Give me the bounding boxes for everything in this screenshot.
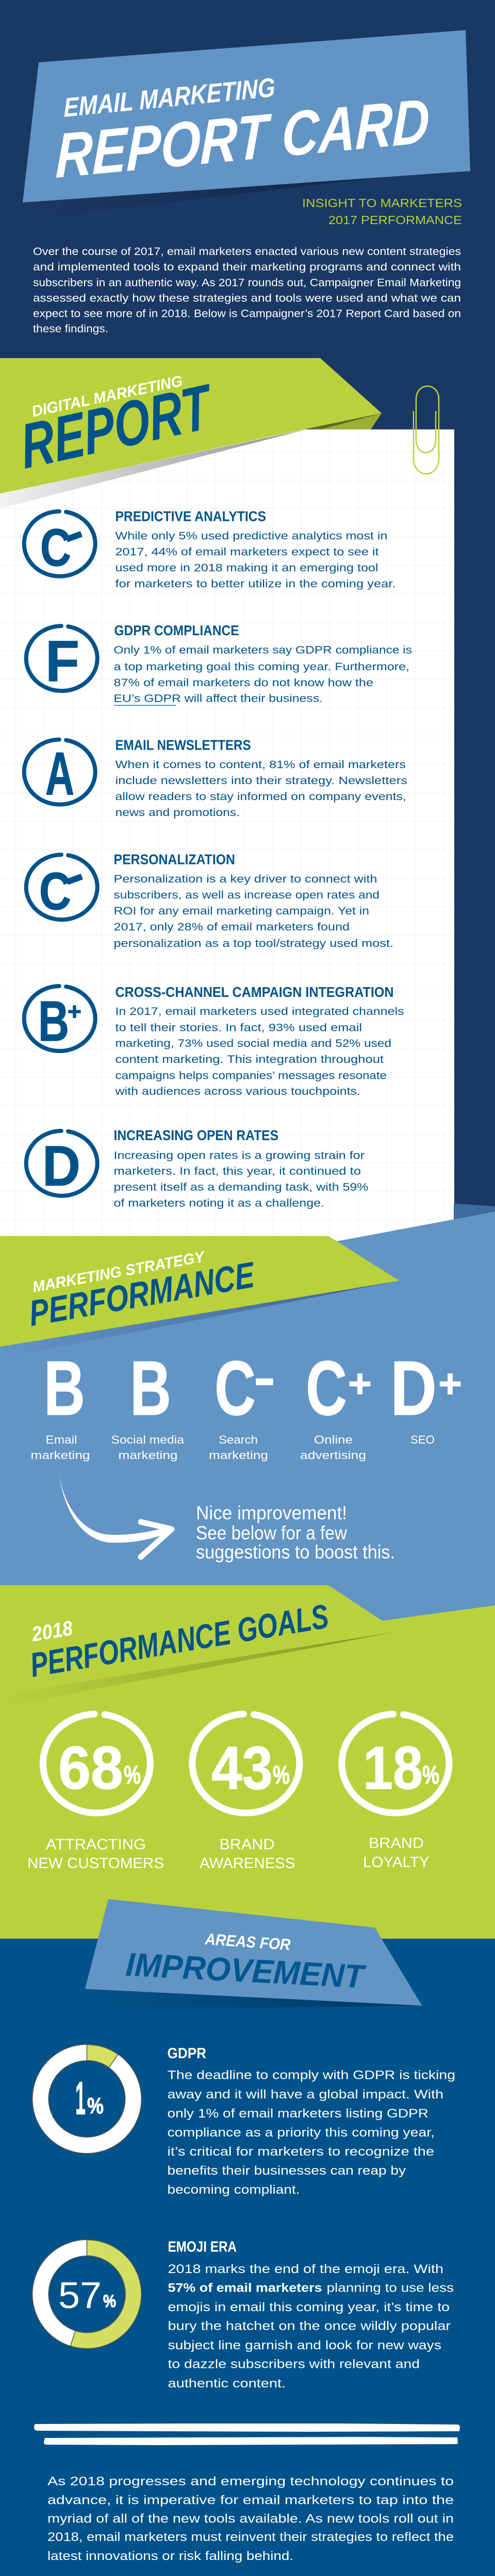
heading: improvement: IMPROVEMENT — [125, 1946, 367, 1995]
body: emoji era: 57% of email marketers — [168, 2281, 322, 2295]
grade: search marketing: C — [214, 1345, 256, 1431]
goal: brand loyalty: BRAND — [369, 1835, 424, 1852]
heading: areas for: AREAS FOR — [204, 1930, 291, 1954]
heading: EMAIL NEWSLETTERS — [116, 737, 251, 753]
body: When it comes to content, 81% of email marketers — [116, 759, 406, 771]
body: news and promotions. — [116, 807, 240, 819]
body: to tell their stories. In fact, 93% used email — [116, 1022, 362, 1033]
heading: CROSS-CHANNEL CAMPAIGN INTEGRATION — [116, 984, 394, 1000]
body: allow readers to stay informed on company events, — [116, 791, 406, 803]
grade: search marketing: marketing — [209, 1449, 268, 1462]
banner shadow — [0, 1281, 399, 1358]
chart: 1 percent ring: % — [87, 2093, 104, 2119]
panel: title banner — [23, 30, 470, 218]
goal: attracting new customers: NEW CUSTOMERS — [27, 1855, 164, 1872]
arrow — [59, 1475, 172, 1557]
heading: performance: PERFORMANCE — [27, 1254, 257, 1334]
body: In 2017, email marketers used integrated channels — [116, 1006, 404, 1018]
heading: report: REPORT — [17, 370, 217, 482]
panel: digital marketing report banner — [0, 358, 382, 509]
body: gdpr: only 1% of email marketers listing GDPR — [167, 2107, 428, 2121]
goal: brand loyalty: 18 — [363, 1734, 423, 1802]
subtitle — [302, 196, 462, 227]
grade: seo: SEO — [410, 1433, 435, 1446]
intro text block: expect to see more of in 2018. Below is Campaigner’s 2017 Report Card based on — [33, 308, 461, 319]
banner shape — [0, 1585, 398, 1695]
heading: gdpr: GDPR — [167, 2045, 206, 2062]
grade: seo: + — [438, 1361, 462, 1406]
heading: PERSONALIZATION — [113, 851, 235, 868]
text block: closing paragraph: latest innovations or risk falling behind. — [47, 2549, 293, 2563]
chart: 1 percent ring: 1 — [75, 2073, 86, 2125]
heading: INCREASING OPEN RATES — [113, 1127, 278, 1143]
body: a top marketing goal this coming year. Furthermore, — [113, 661, 409, 673]
panel background — [0, 1939, 495, 2576]
heading: 2018: 2018 — [29, 1617, 75, 1646]
goal: brand awareness: % — [273, 1760, 290, 1789]
body: used more in 2018 making it an emerging tool — [116, 562, 378, 574]
heading: performance goals: PERFORMANCE GOALS — [27, 1597, 331, 1684]
item: personalization — [26, 849, 393, 950]
intro text block — [33, 246, 461, 335]
grade: search marketing: - — [254, 1349, 275, 1406]
fold strip — [454, 1204, 495, 1219]
callout: See below for a few — [196, 1522, 347, 1544]
callout: suggestions to boost this. — [196, 1541, 395, 1563]
chart: 57 percent ring: 57 — [58, 2275, 102, 2316]
body: with audiences across various touchpoints. — [114, 1086, 360, 1097]
body: gdpr: it’s critical for marketers to recognize the — [167, 2145, 434, 2159]
goal: brand awareness: 43 — [211, 1734, 273, 1802]
body: include newsletters into their strategy. Newsletters — [116, 775, 407, 787]
grade: C minus: C — [39, 862, 71, 921]
banner shape — [85, 1899, 422, 2006]
body: While only 5% used predictive analytics most in — [116, 530, 388, 542]
body: 2017, only 28% of email marketers found — [113, 921, 350, 933]
fold light — [320, 413, 382, 430]
grade: online advertising: + — [348, 1361, 372, 1406]
panel background — [0, 1212, 495, 1700]
body: present itself as a demanding task, with 59% — [113, 1181, 368, 1193]
grade: online advertising: advertising — [300, 1449, 366, 1462]
banner shape — [0, 1236, 399, 1347]
body: EU’s GDPR will affect their business. — [113, 692, 323, 705]
heading: GDPR COMPLIANCE — [114, 622, 239, 638]
item: email newsletters — [24, 737, 407, 819]
grade: social media marketing: Social media — [111, 1433, 185, 1446]
goal: brand loyalty: LOYALTY — [363, 1854, 429, 1871]
body: emoji era: 2018 marks the end of the emoji era. With — [168, 2262, 443, 2276]
body: gdpr: away and it will have a global impact. With — [167, 2088, 443, 2102]
body: emoji era — [168, 2262, 454, 2391]
grade: social media marketing — [111, 1345, 185, 1462]
body: 2017, 44% of email marketers expect to see it — [116, 546, 379, 558]
grade: search marketing — [209, 1345, 275, 1462]
paper shadow — [0, 430, 306, 509]
grade: online advertising: C — [306, 1345, 347, 1431]
body: gdpr: becoming compliant. — [167, 2183, 300, 2197]
body: content marketing. This integration throughout — [116, 1054, 384, 1065]
panel: marketing strategy performance — [0, 1212, 495, 1700]
icon: paperclip — [414, 386, 439, 474]
banner shape — [0, 358, 382, 494]
body — [114, 1006, 404, 1097]
item: cross-channel campaign integration — [24, 984, 404, 1097]
heading: PREDICTIVE ANALYTICS — [116, 508, 266, 524]
body: ROI for any email marketing campaign. Yet in — [113, 905, 369, 917]
grade: C minus — [24, 506, 95, 577]
goal: brand loyalty: % — [422, 1760, 439, 1789]
body: emoji era: planning to use less — [327, 2281, 454, 2295]
body: gdpr — [167, 2068, 455, 2197]
chart: 57 percent ring: % — [103, 2292, 116, 2311]
panel: report paper — [0, 430, 454, 1254]
body: emoji era: to dazzle subscribers with relevant and — [168, 2358, 420, 2371]
banner shadow — [33, 177, 382, 218]
body: of marketers noting it as a challenge. — [113, 1197, 324, 1209]
grade: F: F — [45, 629, 79, 693]
grade: email marketing — [31, 1345, 90, 1462]
title: email marketing: EMAIL MARKETING — [63, 73, 275, 123]
body — [113, 873, 393, 950]
grade: online advertising — [300, 1345, 372, 1462]
grade: B plus: + — [68, 998, 81, 1025]
goal: brand awareness: AWARENESS — [200, 1855, 295, 1872]
body — [116, 759, 407, 819]
body: gdpr: compliance as a priority this coming year, — [167, 2126, 435, 2140]
grade: social media marketing: marketing — [119, 1449, 177, 1462]
body: marketers. In fact, this year, it continued to — [113, 1165, 361, 1177]
body: gdpr: The deadline to comply with GDPR is ticking — [167, 2068, 455, 2082]
fold dark — [306, 413, 382, 430]
goal: attracting new customers: ATTRACTING — [46, 1836, 146, 1853]
body: Increasing open rates is a growing strain for — [113, 1150, 365, 1161]
subtitle: 2017 PERFORMANCE — [328, 213, 462, 227]
callout — [196, 1502, 395, 1563]
goal: brand loyalty — [342, 1714, 449, 1871]
grade: seo — [390, 1345, 462, 1446]
divider: double brush line — [34, 2424, 460, 2445]
grade: search marketing: Search — [219, 1433, 258, 1446]
grade: D — [26, 1131, 97, 1198]
text block: closing paragraph — [47, 2475, 454, 2563]
grade: B plus — [24, 986, 95, 1053]
body: marketing, 73% used social media and 52% used — [116, 1038, 391, 1049]
link underline — [114, 705, 176, 706]
grade: D: D — [42, 1134, 80, 1198]
heading: marketing strategy: MARKETING STRATEGY — [31, 1248, 207, 1296]
intro text block: assessed exactly how these strategies and tools were used and what we can — [33, 293, 461, 304]
text block: closing paragraph: 2018, email marketers must reinvent their strategies to reflect the — [47, 2530, 454, 2544]
banner shadow — [0, 1631, 398, 1707]
callout: Nice improvement! — [196, 1502, 347, 1523]
grade: email marketing: Email — [45, 1433, 77, 1446]
grade: C minus: - — [55, 849, 91, 904]
item: gdpr compliance — [26, 622, 412, 706]
body: Personalization is a key driver to connect with — [113, 873, 377, 885]
heading: emoji era: EMOJI ERA — [168, 2239, 237, 2256]
intro text block: subscribers in an authentic way. As 2017 rounds out, Campaigner Email Marketing — [33, 277, 461, 289]
grade: C minus — [26, 849, 97, 921]
banner shadow — [96, 1989, 422, 2010]
body: subscribers, as well as increase open rates and — [113, 889, 380, 901]
intro text block: and implemented tools to expand their marketing programs and connect with — [33, 261, 461, 273]
panel background — [0, 1605, 495, 1939]
heading: digital marketing: DIGITAL MARKETING — [30, 372, 184, 420]
grade: C minus: - — [55, 506, 91, 561]
panel: 2018 performance goals — [0, 1585, 495, 1939]
text block: closing paragraph: advance, it is imperative for email marketers to tap into the — [47, 2494, 454, 2507]
goal: brand awareness: BRAND — [220, 1836, 274, 1853]
grade: C minus: C — [40, 518, 71, 577]
goal: attracting new customers: 68 — [58, 1734, 123, 1802]
panel: header background — [0, 0, 495, 1208]
grade: social media marketing: B — [130, 1345, 171, 1431]
goal: brand awareness — [192, 1714, 300, 1872]
item: increasing open rates — [26, 1127, 368, 1209]
body: for marketers to better utilize in the coming year. — [116, 578, 396, 590]
grade: A: A — [45, 740, 74, 808]
body: gdpr: benefits their businesses can reap by — [167, 2164, 406, 2178]
body: 87% of email marketers do not know how the — [113, 677, 373, 689]
goal: attracting new customers: % — [124, 1760, 141, 1789]
text block: closing paragraph: myriad of all of the new tools available. As new tools roll out in — [47, 2512, 454, 2526]
item: predictive analytics — [24, 506, 396, 590]
text block: closing paragraph: As 2018 progresses and emerging technology continues to — [47, 2475, 454, 2488]
body: Only 1% of email marketers say GDPR compliance is — [113, 644, 412, 656]
grade: email marketing: marketing — [31, 1449, 90, 1462]
banner shape — [23, 30, 470, 202]
goal: attracting new customers — [27, 1714, 164, 1872]
chart: 57 percent ring — [40, 2240, 141, 2348]
grade: A — [24, 740, 95, 808]
grade: email marketing: B — [44, 1345, 85, 1431]
intro text block: Over the course of 2017, email marketers enacted various new content strategies — [33, 246, 461, 258]
subtitle: INSIGHT TO MARKETERS — [302, 196, 462, 210]
chart: 1 percent ring — [40, 2044, 133, 2145]
grade: F — [26, 626, 97, 693]
body: emoji era: emojis in email this coming year, it’s time to — [168, 2300, 450, 2314]
body — [113, 1150, 368, 1209]
body: campaigns helps companies’ messages resonate — [116, 1070, 387, 1082]
grade: seo: D — [390, 1345, 437, 1431]
body: personalization as a top tool/strategy used most. — [113, 938, 393, 950]
body: emoji era: authentic content. — [168, 2377, 286, 2391]
body — [113, 644, 412, 705]
panel: areas for improvement — [0, 1899, 495, 2576]
body: emoji era: bury the hatchet on the once wildly popular — [168, 2319, 451, 2333]
body: emoji era: subject line garnish and look for new ways — [168, 2338, 441, 2352]
grade: online advertising: Online — [314, 1433, 353, 1446]
body — [116, 530, 396, 590]
grade: B plus: B — [38, 990, 69, 1053]
intro text block: these findings. — [33, 323, 108, 335]
